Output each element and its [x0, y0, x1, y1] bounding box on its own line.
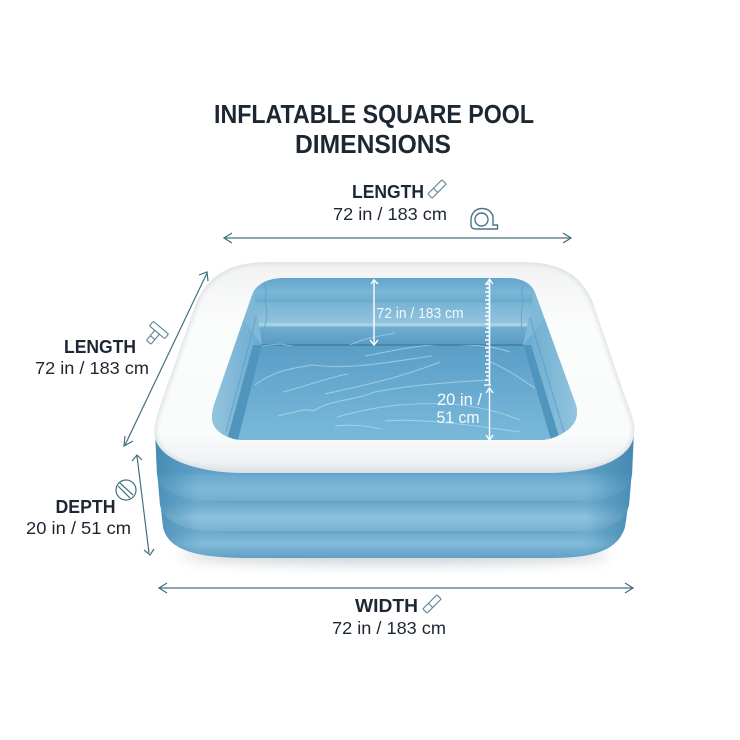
pool outer body	[155, 430, 634, 558]
left length label	[35, 337, 149, 378]
left length label: LENGTH	[64, 337, 136, 357]
arrow: inner length	[370, 280, 378, 345]
width label: WIDTH	[355, 596, 418, 616]
side wall dark strips	[227, 345, 262, 440]
corner tube creases	[226, 284, 564, 432]
inner pool walls	[212, 278, 577, 440]
inner length label: 72 in / 183 cm	[376, 306, 464, 322]
title	[214, 101, 534, 159]
middle tube	[157, 470, 632, 533]
water line	[262, 344, 523, 346]
width label	[332, 596, 446, 638]
icon: ruler beside top length	[428, 180, 446, 198]
arrow: width	[159, 583, 633, 593]
arrow: left length	[124, 272, 208, 446]
left inner wall	[212, 320, 262, 440]
depth label: DEPTH	[56, 497, 116, 517]
ripples on far wall	[262, 333, 395, 346]
top length label: 72 in / 183 cm	[333, 204, 447, 224]
icon: depth circle	[116, 480, 136, 500]
inner depth label: 51 cm	[436, 408, 480, 427]
ruler scale	[484, 279, 493, 385]
title: INFLATABLE SQUARE POOL	[214, 101, 534, 129]
arrow: inner depth	[486, 388, 493, 440]
lower tube	[160, 500, 629, 558]
far inner wall	[254, 278, 534, 344]
depth label: 20 in / 51 cm	[26, 518, 131, 538]
icon: tape measure	[471, 208, 498, 229]
left length label: 72 in / 183 cm	[35, 358, 149, 378]
infographic canvas	[26, 104, 634, 634]
icon: roller beside left length	[141, 321, 169, 349]
white rim	[154, 262, 635, 473]
title: DIMENSIONS	[295, 131, 451, 159]
inner depth label: 20 in /	[437, 390, 482, 409]
pool	[154, 262, 635, 565]
pool floor water	[238, 345, 551, 440]
depth label	[26, 497, 131, 538]
upper tube	[155, 430, 634, 503]
arrow: top length	[224, 233, 571, 243]
top length label: LENGTH	[352, 182, 424, 202]
inner depth label	[436, 390, 482, 427]
icon: ruler beside width	[423, 595, 441, 613]
pool ground shadow	[180, 547, 610, 565]
right inner wall	[523, 318, 577, 438]
top length label	[333, 182, 447, 224]
water ripples	[255, 344, 535, 432]
width label: 72 in / 183 cm	[332, 618, 446, 638]
arrow: depth	[132, 455, 154, 555]
